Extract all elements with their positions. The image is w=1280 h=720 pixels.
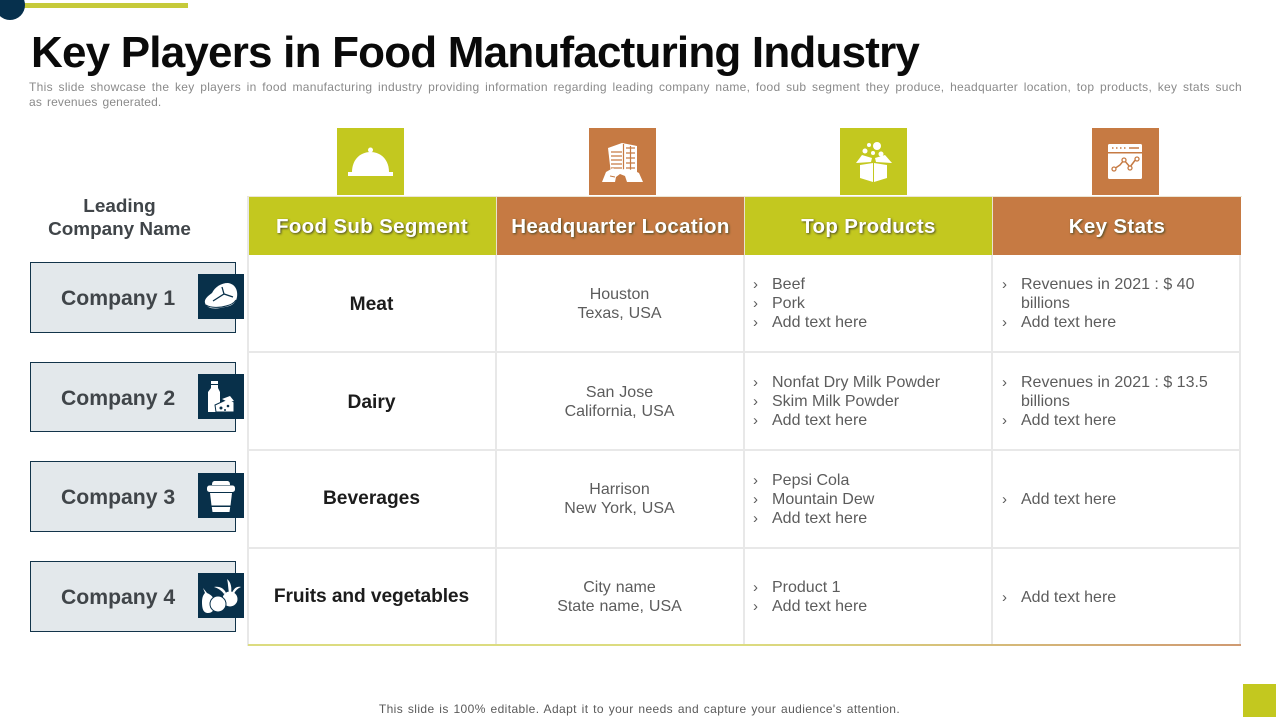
table bottom rule — [248, 644, 1241, 646]
row 3 products: Pepsi Cola — [772, 472, 849, 489]
icon: steak — [198, 274, 244, 319]
accent circle — [0, 0, 25, 20]
row 3 products: Mountain Dew — [772, 491, 874, 508]
subtitle: This slide showcase the key players in food manufacturing industry providing information regarding leading company name, food sub segment they produce, headquarter location, top products, key stats such — [29, 80, 1242, 94]
column header: Key Stats — [992, 197, 1241, 255]
row 4 stats: › — [1002, 589, 1007, 606]
row 2 products: Add text here — [772, 412, 867, 429]
column header: Headquarter Location: Headquarter Location — [511, 215, 730, 238]
row 2 stats: Revenues in 2021 : $ 13.5 — [1021, 374, 1208, 391]
row 2 stats — [992, 353, 1241, 451]
row 2 location — [496, 353, 745, 451]
row 2 stats: billions — [1021, 393, 1070, 410]
company 2 label: Company 2 — [61, 387, 175, 410]
icon: office building — [589, 128, 656, 195]
row 1 stats: billions — [1021, 295, 1070, 312]
row 3 products: › — [753, 472, 758, 489]
row 4 location: City name — [583, 579, 656, 596]
row 4 location: State name, USA — [557, 598, 682, 615]
title: Key Players in Food Manufacturing Industry — [31, 28, 919, 77]
row 4 products: › — [753, 579, 758, 596]
row 2 dairy: Dairy — [348, 392, 396, 413]
row 2 products — [744, 353, 993, 451]
subtitle — [29, 80, 1242, 109]
subtitle: as revenues generated. — [29, 95, 161, 109]
left column heading: Leading — [83, 196, 156, 217]
row 1 location — [496, 255, 745, 353]
row 4 products: Product 1 — [772, 579, 840, 596]
icon: browser line chart — [1092, 128, 1159, 195]
row 1 location: Houston — [590, 286, 649, 303]
corner square — [1243, 684, 1276, 717]
row 3 stats: Add text here — [1021, 491, 1116, 508]
column header: Food Sub Segment — [248, 197, 496, 255]
row 3 location: Harrison — [589, 481, 650, 498]
row 4 products — [744, 549, 993, 646]
row 1 meat — [248, 255, 497, 353]
row 2 products: Nonfat Dry Milk Powder — [772, 374, 940, 391]
row 1 products — [744, 255, 993, 353]
row 1 products: Pork — [772, 295, 805, 312]
row 1 meat: Meat — [350, 294, 393, 315]
row 1 stats: Add text here — [1021, 314, 1116, 331]
icon: fruits and vegetables — [198, 573, 244, 618]
company 3 label — [30, 461, 236, 532]
row 2 stats: › — [1002, 412, 1007, 429]
footer note: This slide is 100% editable. Adapt it to your needs and capture your audience's attention. — [379, 702, 900, 716]
row 3 products: › — [753, 491, 758, 508]
row 1 stats: › — [1002, 276, 1007, 293]
column header: Top Products: Top Products — [801, 215, 936, 238]
row 2 products: › — [753, 374, 758, 391]
row 3 stats: › — [1002, 491, 1007, 508]
row 2 location: California, USA — [565, 403, 674, 420]
top table border — [247, 196, 1242, 197]
row 3 products: › — [753, 510, 758, 527]
row 4 location — [496, 549, 745, 646]
row 2 products: Skim Milk Powder — [772, 393, 899, 410]
row 4 fruits and vegetables: Fruits and vegetables — [274, 586, 469, 607]
icon: open box with items — [840, 128, 907, 195]
row 1 stats — [992, 255, 1241, 353]
column header: Key Stats: Key Stats — [1069, 215, 1165, 238]
row 1 stats: › — [1002, 314, 1007, 331]
left column heading: Company Name — [48, 219, 191, 240]
row 2 stats: Add text here — [1021, 412, 1116, 429]
company 2 label — [30, 362, 236, 432]
row 1 location: Texas, USA — [577, 305, 662, 322]
row 2 products: › — [753, 412, 758, 429]
row 4 products: Add text here — [772, 598, 867, 615]
row 3 beverages: Beverages — [323, 488, 420, 509]
row 2 dairy — [248, 353, 497, 451]
column header: Food Sub Segment: Food Sub Segment — [276, 215, 468, 238]
row 1 products: › — [753, 314, 758, 331]
company 1 label — [30, 262, 236, 333]
icon: takeaway cup — [198, 473, 244, 518]
row 3 location — [496, 451, 745, 549]
row 4 stats: Add text here — [1021, 589, 1116, 606]
row 2 stats: › — [1002, 374, 1007, 391]
company 3 label: Company 3 — [61, 486, 175, 509]
company 1 label: Company 1 — [61, 287, 175, 310]
row 1 products: Beef — [772, 276, 805, 293]
row 1 stats: Revenues in 2021 : $ 40 — [1021, 276, 1194, 293]
row 1 products: › — [753, 295, 758, 312]
company 4 label: Company 4 — [61, 586, 175, 609]
row 3 stats — [992, 451, 1241, 549]
icon: serving cloche — [337, 128, 404, 195]
row 4 products: › — [753, 598, 758, 615]
row 3 products — [744, 451, 993, 549]
company 4 label — [30, 561, 236, 632]
row 3 products: Add text here — [772, 510, 867, 527]
row 2 location: San Jose — [586, 384, 653, 401]
row 1 products: Add text here — [772, 314, 867, 331]
row 4 fruits and vegetables — [248, 549, 497, 646]
left table border — [247, 196, 249, 646]
column header: Top Products — [744, 197, 992, 255]
left column heading — [48, 196, 191, 240]
row 1 products: › — [753, 276, 758, 293]
accent bar — [20, 3, 188, 8]
row 2 products: › — [753, 393, 758, 410]
row 3 location: New York, USA — [564, 500, 675, 517]
icon: milk and cheese — [198, 374, 244, 419]
row 4 stats — [992, 549, 1241, 646]
column header: Headquarter Location — [496, 197, 744, 255]
row 3 beverages — [248, 451, 497, 549]
